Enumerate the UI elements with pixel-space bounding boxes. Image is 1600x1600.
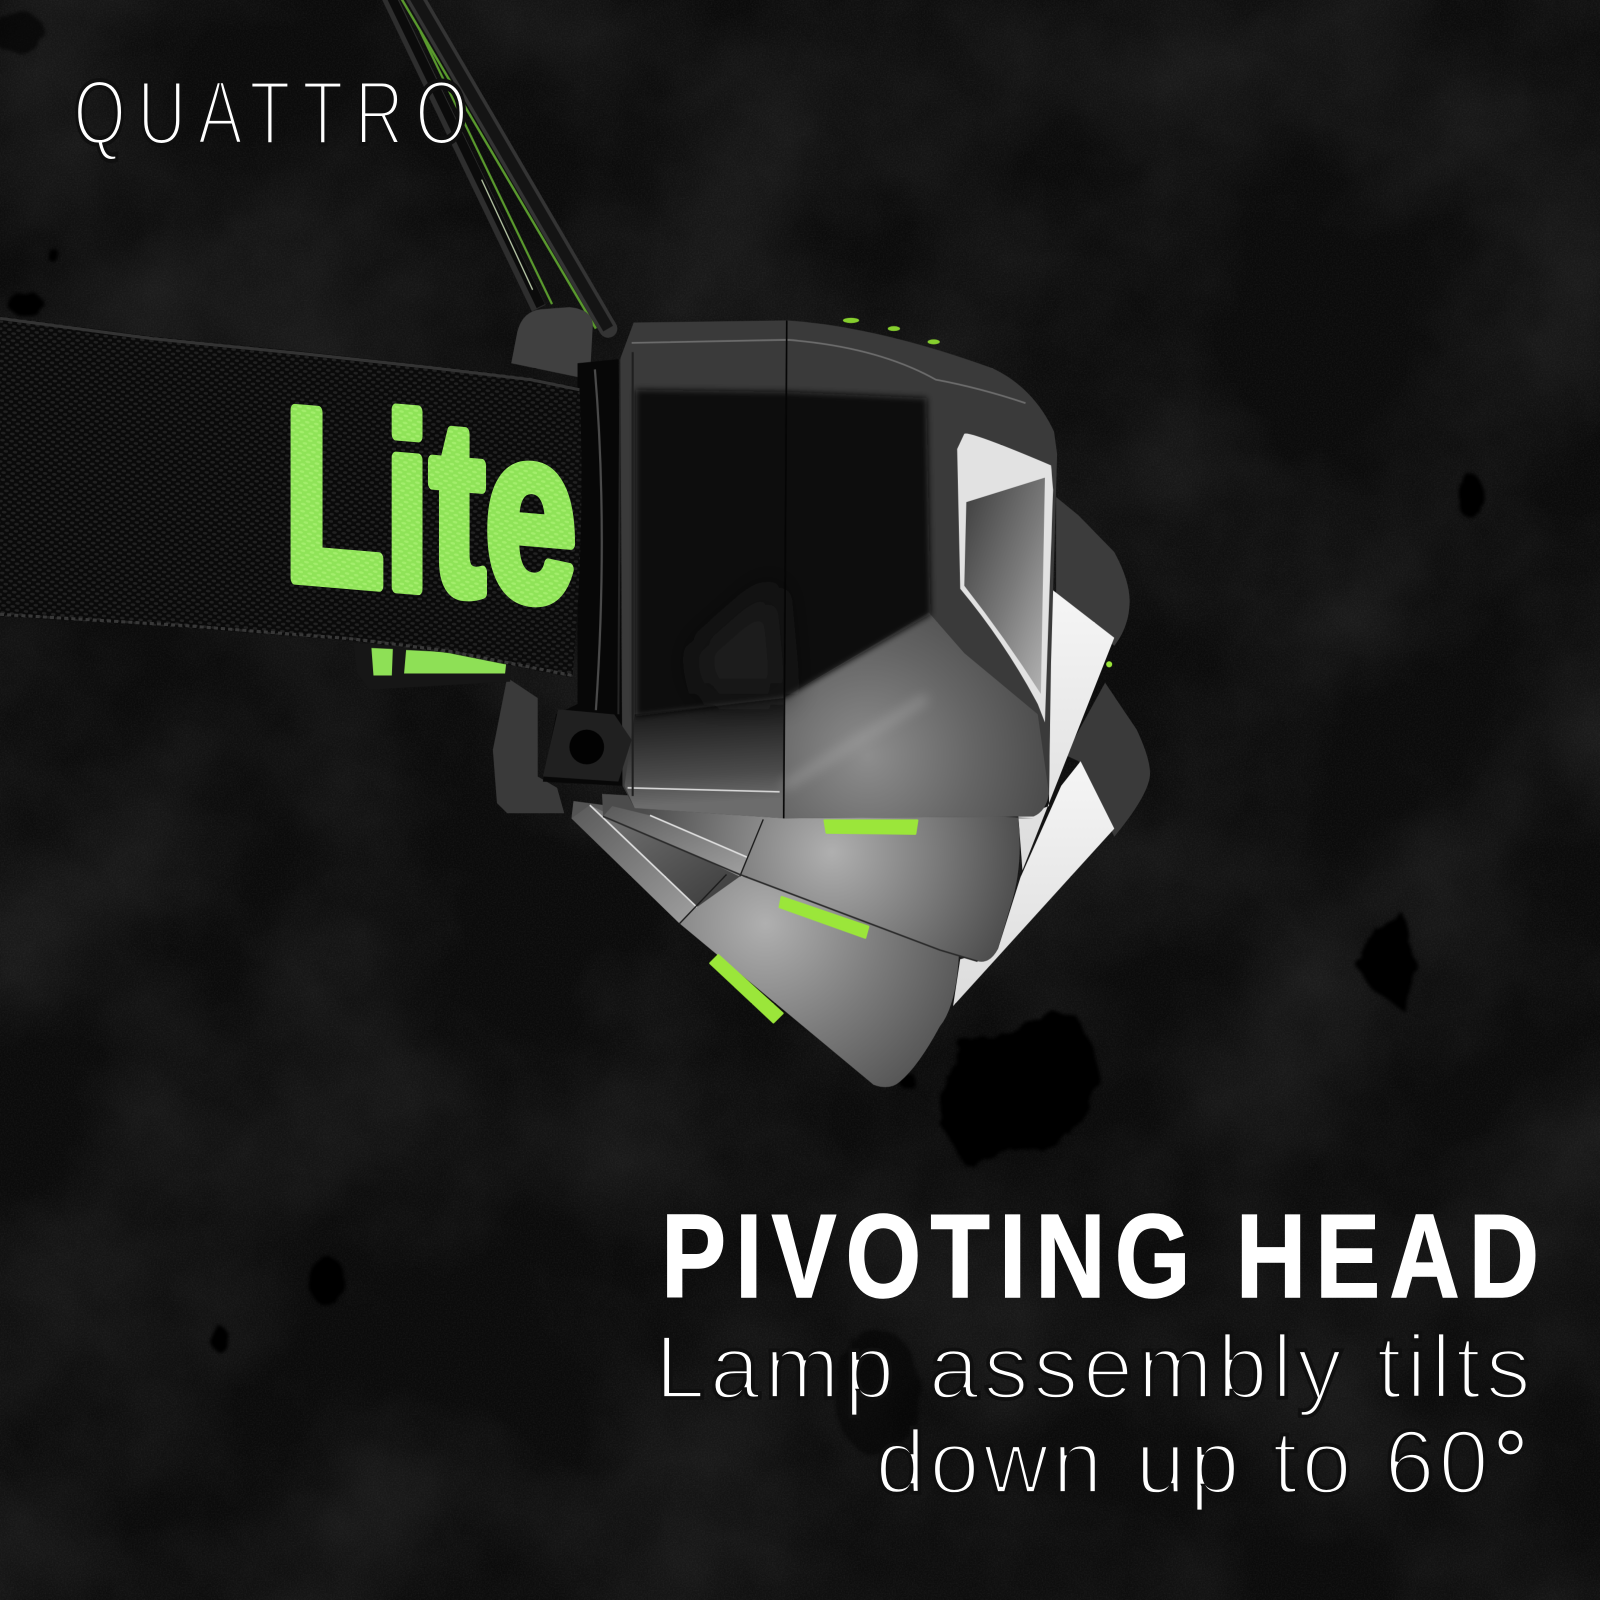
- rear lamp: rear side strip: [571, 805, 697, 923]
- head strap: vertical top cords: [389, 0, 608, 329]
- description text: [655, 1318, 1531, 1513]
- rear lamp: upper facet: [590, 805, 740, 907]
- front lamp: lower rear facet: [624, 698, 786, 818]
- rear lamp: green button: [710, 955, 783, 1022]
- front lamp: clear lens frame: [957, 433, 1053, 722]
- black mounting bracket: [543, 359, 622, 786]
- front lamp: faint reflection: [694, 582, 786, 694]
- hinge tab with pivot hole: [543, 709, 632, 782]
- strap anchor: upper plate: [511, 307, 593, 380]
- middle lamp position: second head, tilted 30 degrees: [602, 497, 1130, 962]
- middle lamp: rear side strip: [603, 806, 747, 874]
- front lamp: moulded edge highlights: [628, 320, 1026, 818]
- heading: PIVOTING HEAD: PIVOTING HEAD: [661, 1190, 1539, 1322]
- rear lamp position: third head, tilted 60 degrees: [571, 683, 1150, 1087]
- front lamp: shadowed side panel: [636, 390, 931, 716]
- rear lamp: white lens: [953, 761, 1114, 1006]
- front lamp: lens glass: [964, 478, 1045, 694]
- front lamp: soft diagonal glint: [784, 698, 927, 787]
- middle lamp: green button: [780, 897, 868, 938]
- brand name: QUATTRO: QUATTRO: [73, 62, 468, 163]
- middle lamp: white lens: [1018, 589, 1114, 870]
- rear lamp: grey body: [571, 801, 959, 1087]
- strap anchor: lower plate: [493, 678, 564, 813]
- front lamp: lower front facet: [784, 612, 1049, 818]
- elastic headband with Lite logo: [0, 306, 592, 694]
- folded strap end with green lettering: [353, 643, 510, 690]
- front lamp: green top studs: [843, 318, 940, 344]
- rear lamp: dark top shell: [1065, 683, 1150, 837]
- woven Lite logo: Lite: [284, 356, 577, 654]
- middle lamp: dark top shell: [1056, 497, 1130, 646]
- middle lamp: small green marker: [1106, 661, 1112, 667]
- description text: down up to 60°: [876, 1413, 1529, 1513]
- front lamp: housing silhouette: [620, 320, 1057, 818]
- front lamp: green button: [824, 820, 917, 834]
- description text: Lamp assembly tilts: [655, 1318, 1531, 1418]
- middle lamp: grey body: [602, 794, 1034, 962]
- front lamp position: main head, level: [620, 318, 1057, 834]
